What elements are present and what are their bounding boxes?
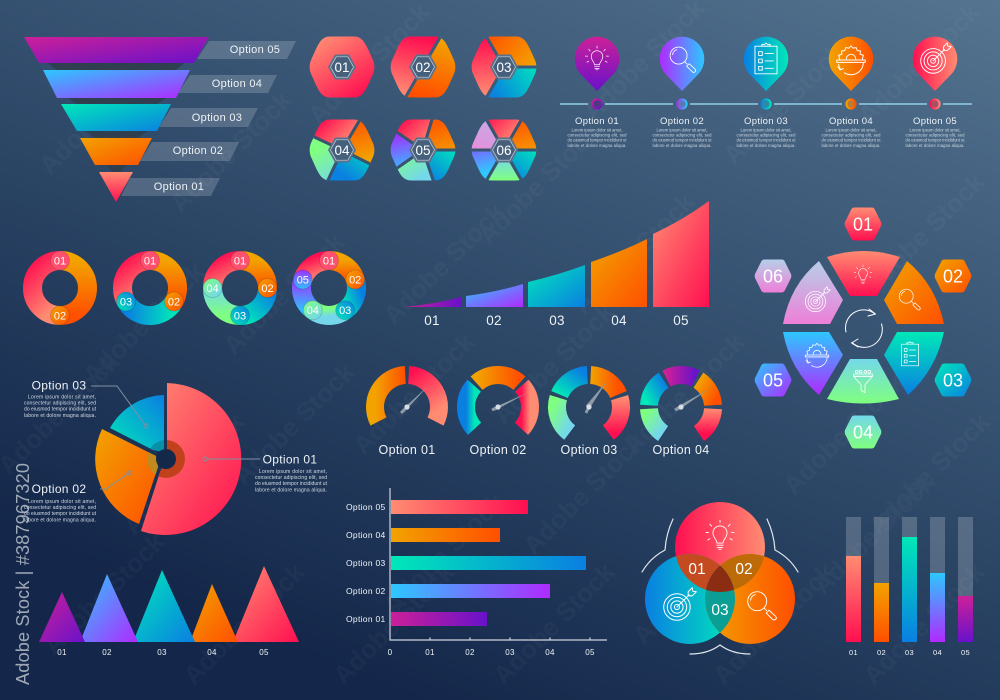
- text: Adobe Stock: [617, 326, 751, 460]
- pie label: option 01: labore et dolore magna aliqua.: [255, 487, 327, 493]
- triangle labels: 02: [102, 648, 112, 657]
- bar: option 05: [346, 500, 528, 514]
- icon: bulb: [706, 520, 734, 549]
- text: Adobe Stock: [717, 36, 851, 170]
- funnel chart: [24, 37, 296, 202]
- hex label 04: 04: [853, 422, 873, 442]
- growth bar labels: 05: [673, 313, 689, 328]
- timeline step 03: [736, 37, 796, 148]
- bar chart axis labels: 01: [425, 648, 435, 657]
- timeline step 02: do eiusmod tempor incididunt ut: [652, 138, 712, 143]
- donut with 5 segments: 05: [297, 274, 309, 286]
- column 01: 01: [849, 648, 858, 657]
- text: Adobe Stock: [807, 466, 941, 600]
- donut with 3 segments: 02: [168, 296, 180, 308]
- bar chart axis labels: [388, 648, 595, 657]
- timeline step 01: Lorem ipsum dolor sit amet,: [572, 128, 622, 132]
- timeline step 04: labore et dolore magna aliqua.: [822, 143, 880, 148]
- timeline step 01: consectetur adipiscing elit, sed: [568, 133, 627, 138]
- donut with 5 segments: [293, 251, 365, 320]
- hexagon 01: [310, 36, 374, 98]
- donut with 2 segments: [33, 251, 87, 325]
- text: Adobe Stock: [302, 0, 436, 130]
- hexagon 04: [310, 120, 374, 180]
- bar: option 04: Option 04: [346, 530, 386, 540]
- venn brackets: [642, 519, 798, 654]
- text: Adobe Stock: [862, 406, 996, 540]
- gauge: option 04: Option 04: [653, 443, 709, 457]
- text: Adobe Stock: [117, 406, 251, 540]
- donut with 3 segments: [116, 251, 184, 316]
- gauge: option 02: Option 02: [470, 443, 526, 457]
- hex label 01: 01: [853, 214, 873, 234]
- growth bar 04: [591, 239, 647, 307]
- hex label 03: 03: [943, 370, 963, 390]
- column 02: 02: [877, 648, 886, 657]
- hexagon 06: 06: [496, 143, 512, 158]
- funnel tab: option 01: [121, 178, 220, 196]
- timeline step 02: consectetur adipiscing elit, sed: [652, 133, 712, 138]
- gauges: [375, 375, 713, 457]
- growth bar 02: [466, 284, 523, 307]
- timeline step 02: Lorem ipsum dolor sit amet,: [656, 128, 708, 132]
- timeline step 02: Option 02: [660, 116, 704, 127]
- hex label 02: 02: [943, 266, 963, 286]
- timeline step 04: Lorem ipsum dolor sit amet,: [826, 128, 876, 132]
- growth bar 05: [653, 201, 709, 307]
- text: Adobe Stock: [327, 556, 461, 690]
- text: Adobe Stock: [347, 326, 481, 460]
- horizontal bar chart: [346, 488, 607, 657]
- triangle labels: 05: [259, 648, 269, 657]
- pie label: option 01: Lorem ipsum dolor sit amet,: [259, 469, 327, 475]
- text: Adobe Stock: [487, 556, 621, 690]
- text: Adobe Stock: [777, 366, 911, 500]
- growth bar 03: [528, 265, 585, 307]
- donut with 5 segments: 03: [339, 305, 351, 317]
- pie label: option 03: do eiusmod tempor incididunt ut: [24, 407, 97, 413]
- bar: option 02: Option 02: [346, 586, 386, 596]
- hex label 03: [935, 364, 971, 396]
- donut with 3 segments: 01: [144, 256, 156, 268]
- pie label: option 02: labore et dolore magna aliqua.: [24, 517, 96, 523]
- timeline step 03: labore et dolore magna aliqua.: [736, 143, 796, 148]
- venn circle: right: [705, 554, 795, 644]
- hex label 06: 06: [763, 266, 783, 286]
- leader lines: [91, 386, 260, 489]
- timeline step 05: Lorem ipsum dolor sit amet,: [910, 128, 960, 132]
- pie slice: option 02: [95, 429, 158, 524]
- funnel tab: option 05: Option 05: [230, 44, 280, 56]
- bar: option 03: Option 03: [346, 558, 386, 568]
- donut with 4 segments: 03: [234, 310, 246, 322]
- triangles: [39, 566, 299, 642]
- text: Adobe Stock: [164, 84, 298, 218]
- hexagon 02: [390, 36, 456, 98]
- funnel layers: [24, 37, 209, 202]
- venn labels: 03: [711, 602, 729, 619]
- pie label: option 02: consectetur adipiscing elit, sed: [24, 505, 96, 511]
- hexagonal cycle diagram: [755, 208, 971, 448]
- column 03: 03: [905, 648, 914, 657]
- triangle labels: 03: [157, 648, 167, 657]
- pie label: option 01: consectetur adipiscing elit, sed: [255, 475, 327, 481]
- growth bar labels: 03: [549, 313, 565, 328]
- timeline step 03: do eiusmod tempor incididunt ut: [736, 138, 796, 143]
- donut charts: [33, 251, 365, 325]
- hex label 05: [755, 364, 791, 396]
- funnel tab: option 02: [140, 142, 239, 161]
- bar chart axis labels: 03: [505, 648, 515, 657]
- text: Adobe Stock: [857, 166, 991, 300]
- gauge: option 04: [649, 375, 713, 457]
- hex label 05: 05: [763, 370, 783, 390]
- timeline step 01: [568, 37, 627, 148]
- timeline step 03: Option 03: [744, 116, 788, 127]
- bar chart axis labels: 02: [465, 648, 475, 657]
- pie slice: option 01: [141, 383, 241, 535]
- bar: option 03: [346, 556, 586, 570]
- venn circle: top: [675, 502, 765, 592]
- growth bar labels: 02: [486, 313, 502, 328]
- hexagon 04: 04: [334, 143, 350, 158]
- timeline: [560, 37, 972, 148]
- pie label: option 01: Option 01: [263, 452, 317, 466]
- cycle arrows: [846, 309, 882, 347]
- gauge: option 03: Option 03: [561, 443, 617, 457]
- hexagon 01: 01: [334, 60, 350, 75]
- hex label 06: [755, 260, 791, 292]
- bar: option 01: [346, 612, 487, 626]
- text: Adobe Stock: [472, 116, 606, 250]
- triangle labels: 01: [57, 648, 67, 657]
- gauge: option 02: [466, 375, 530, 457]
- hex label 02: [935, 260, 971, 292]
- timeline step 02: labore et dolore magna aliqua.: [652, 143, 712, 148]
- funnel tab: option 03: Option 03: [192, 112, 242, 124]
- venn diagram: [642, 502, 798, 654]
- pie label: option 02: [24, 482, 97, 523]
- timeline step 05: labore et dolore magna aliqua.: [906, 143, 964, 148]
- bar: option 01: Option 01: [346, 614, 386, 624]
- icon: magnifier: [748, 592, 776, 620]
- gauge: option 03: [557, 375, 621, 457]
- timeline step 05: Option 05: [913, 116, 957, 127]
- hex label 01: [845, 208, 881, 240]
- timeline step 05: [906, 37, 965, 148]
- timeline step 05: consectetur adipiscing elit, sed: [906, 133, 965, 138]
- donut with 5 segments: 04: [307, 305, 319, 317]
- funnel tab: option 03: [159, 108, 258, 127]
- pie chart: [24, 378, 328, 535]
- text: Adobe Stock: [77, 256, 211, 390]
- text: Adobe Stock: [567, 186, 701, 320]
- cycle segment 06: [783, 261, 843, 324]
- venn labels: 02: [735, 561, 753, 578]
- text: Adobe Stock: [177, 556, 311, 690]
- funnel tab: option 04: Option 04: [212, 78, 262, 90]
- pie label: option 02: Option 02: [32, 482, 86, 496]
- text: Adobe Stock: [852, 0, 986, 130]
- pie label: option 02: do eiusmod tempor incididunt ut: [24, 511, 97, 517]
- bar chart axis labels: 05: [585, 648, 595, 657]
- pie label: option 03: consectetur adipiscing elit, sed: [24, 401, 96, 407]
- growth bar labels: [424, 313, 689, 328]
- donut with 2 segments: 01: [54, 256, 66, 268]
- triangle labels: 04: [207, 648, 217, 657]
- timeline step 04: do eiusmod tempor incididunt ut: [822, 138, 881, 143]
- column 05: 05: [961, 648, 970, 657]
- hex label 04: [845, 416, 881, 448]
- cycle segment 02: [884, 261, 944, 324]
- hexagon 03: 03: [496, 60, 512, 75]
- growth area bars: [404, 201, 709, 328]
- hexagon 02: 02: [415, 60, 431, 75]
- cycle segment 05: [783, 332, 843, 395]
- bar chart axis labels: 04: [545, 648, 555, 657]
- hexagon 05: 05: [415, 143, 431, 158]
- text: Adobe Stock: [227, 356, 361, 490]
- timeline step 04: Option 04: [829, 116, 873, 127]
- funnel tab: option 01: Option 01: [154, 181, 204, 193]
- text: Adobe Stock: [377, 486, 511, 620]
- gauge: option 01: Option 01: [379, 443, 435, 457]
- pie label: option 02: Lorem ipsum dolor sit amet,: [28, 499, 96, 505]
- bar chart axis labels: 0: [388, 648, 393, 657]
- donut with 5 segments: 01: [323, 256, 335, 268]
- pie slice: option 03: [110, 395, 164, 452]
- cycle segment 03: [884, 332, 944, 395]
- text: Adobe Stock: [517, 426, 651, 560]
- hexagon 05: [390, 120, 456, 180]
- pie label: option 03: Option 03: [32, 378, 86, 392]
- pie label: option 03: labore et dolore magna aliqua.: [24, 413, 96, 419]
- timeline line: [560, 103, 972, 105]
- venn labels: 01: [688, 561, 706, 578]
- funnel tab: option 02: Option 02: [173, 145, 223, 157]
- text: Adobe Stock: [627, 516, 761, 650]
- timeline step 03: consectetur adipiscing elit, sed: [736, 133, 796, 138]
- timeline step 01: do eiusmod tempor incididunt ut: [568, 138, 627, 143]
- venn circle: left: [645, 554, 735, 644]
- triangle chart: [39, 566, 299, 657]
- pie label: option 01: [255, 452, 328, 493]
- pie label: option 01: do eiusmod tempor incididunt ut: [255, 481, 328, 487]
- icon: target: [664, 588, 696, 620]
- text: Adobe Stock: [377, 196, 511, 330]
- vertical stock id: Adobe Stock | #387967320: [13, 463, 33, 685]
- cycle segment 01: [827, 251, 900, 296]
- timeline step 03: Lorem ipsum dolor sit amet,: [740, 128, 792, 132]
- timeline step 02: [652, 37, 712, 148]
- donut with 4 segments: 01: [234, 256, 246, 268]
- text: Adobe Stock: [33, 46, 167, 180]
- timeline step 04: consectetur adipiscing elit, sed: [822, 133, 881, 138]
- text: Adobe Stock: [857, 556, 991, 690]
- cycle segment 04: [827, 359, 899, 404]
- timeline step 01: Option 01: [575, 116, 619, 127]
- segmented hexagons: [310, 36, 536, 180]
- text: Adobe Stock: [487, 296, 621, 430]
- venn labels: [688, 561, 753, 619]
- growth bar labels: 01: [424, 313, 440, 328]
- triangle labels: [57, 648, 269, 657]
- text: Adobe Stock: [707, 556, 841, 690]
- hexagon 03: [472, 36, 536, 98]
- column chart: [846, 517, 973, 657]
- pie label: option 03: Lorem ipsum dolor sit amet,: [28, 394, 96, 400]
- bar: option 05: Option 05: [346, 502, 386, 512]
- pie centre rings: [147, 440, 185, 478]
- pie label: option 03: [24, 378, 97, 419]
- hexagon 06: [472, 120, 536, 180]
- venn overlaps: [676, 554, 764, 632]
- donut with 3 segments: 03: [120, 296, 132, 308]
- growth bar labels: 04: [611, 313, 627, 328]
- donut with 4 segments: [203, 251, 277, 325]
- funnel tab: option 05: [197, 41, 296, 59]
- bar chart axes: [390, 488, 607, 640]
- text: Adobe Stock: [217, 226, 351, 360]
- donut with 2 segments: 02: [54, 310, 66, 322]
- funnel tab: option 04: [178, 75, 277, 93]
- gauge: option 01: [375, 375, 439, 457]
- bar: option 04: [346, 528, 500, 542]
- timeline step 05: do eiusmod tempor incididunt ut: [906, 138, 965, 143]
- donut with 4 segments: 02: [261, 283, 274, 295]
- timeline step 04: [822, 37, 881, 148]
- column 04: 04: [933, 648, 942, 657]
- bar: option 02: [346, 584, 550, 598]
- growth bar 01: [404, 297, 461, 307]
- text: Adobe Stock: [37, 526, 171, 660]
- donut with 5 segments: 02: [349, 274, 361, 286]
- donut with 4 segments: 04: [206, 283, 219, 295]
- timeline step 01: labore et dolore magna aliqua.: [568, 143, 626, 148]
